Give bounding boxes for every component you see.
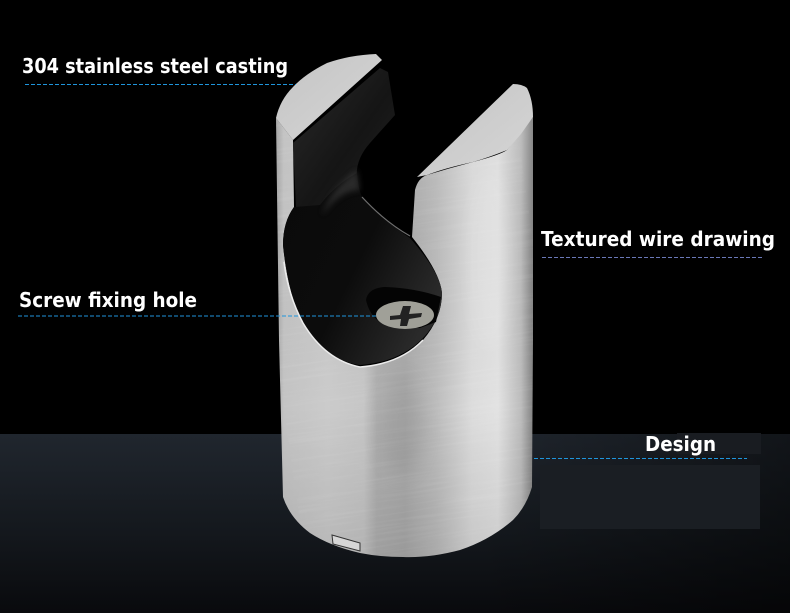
- background: dark blue-grey floor: [0, 434, 790, 613]
- callout: Design: Design: [645, 432, 716, 456]
- black rubber insert upper: [293, 68, 395, 214]
- product: stainless steel holder: [276, 54, 533, 558]
- lit curve on rubber neck: [322, 170, 360, 215]
- highlight along rubber edge: [362, 197, 410, 236]
- text backing panel: [540, 465, 760, 529]
- title backing panel: [677, 433, 761, 454]
- notch at base: [332, 535, 360, 551]
- black rubber hole: [283, 173, 442, 365]
- background: black upper area: [0, 0, 790, 434]
- dark screw recess: [366, 287, 441, 328]
- screw head: [376, 301, 434, 329]
- body shading and brushed texture: [282, 390, 528, 557]
- callout: Textured wire drawing: Textured wire drawing: [541, 227, 775, 251]
- callout: 304 stainless steel casting: 304 stainless steel casting: [22, 54, 288, 78]
- highlight along hole rim: [284, 262, 423, 367]
- right cap: angled cut face: [417, 84, 533, 177]
- callout: Screw fixing hole: Screw fixing hole: [19, 288, 197, 312]
- left cap: angled cut face: [276, 54, 382, 140]
- metal body: [276, 117, 533, 557]
